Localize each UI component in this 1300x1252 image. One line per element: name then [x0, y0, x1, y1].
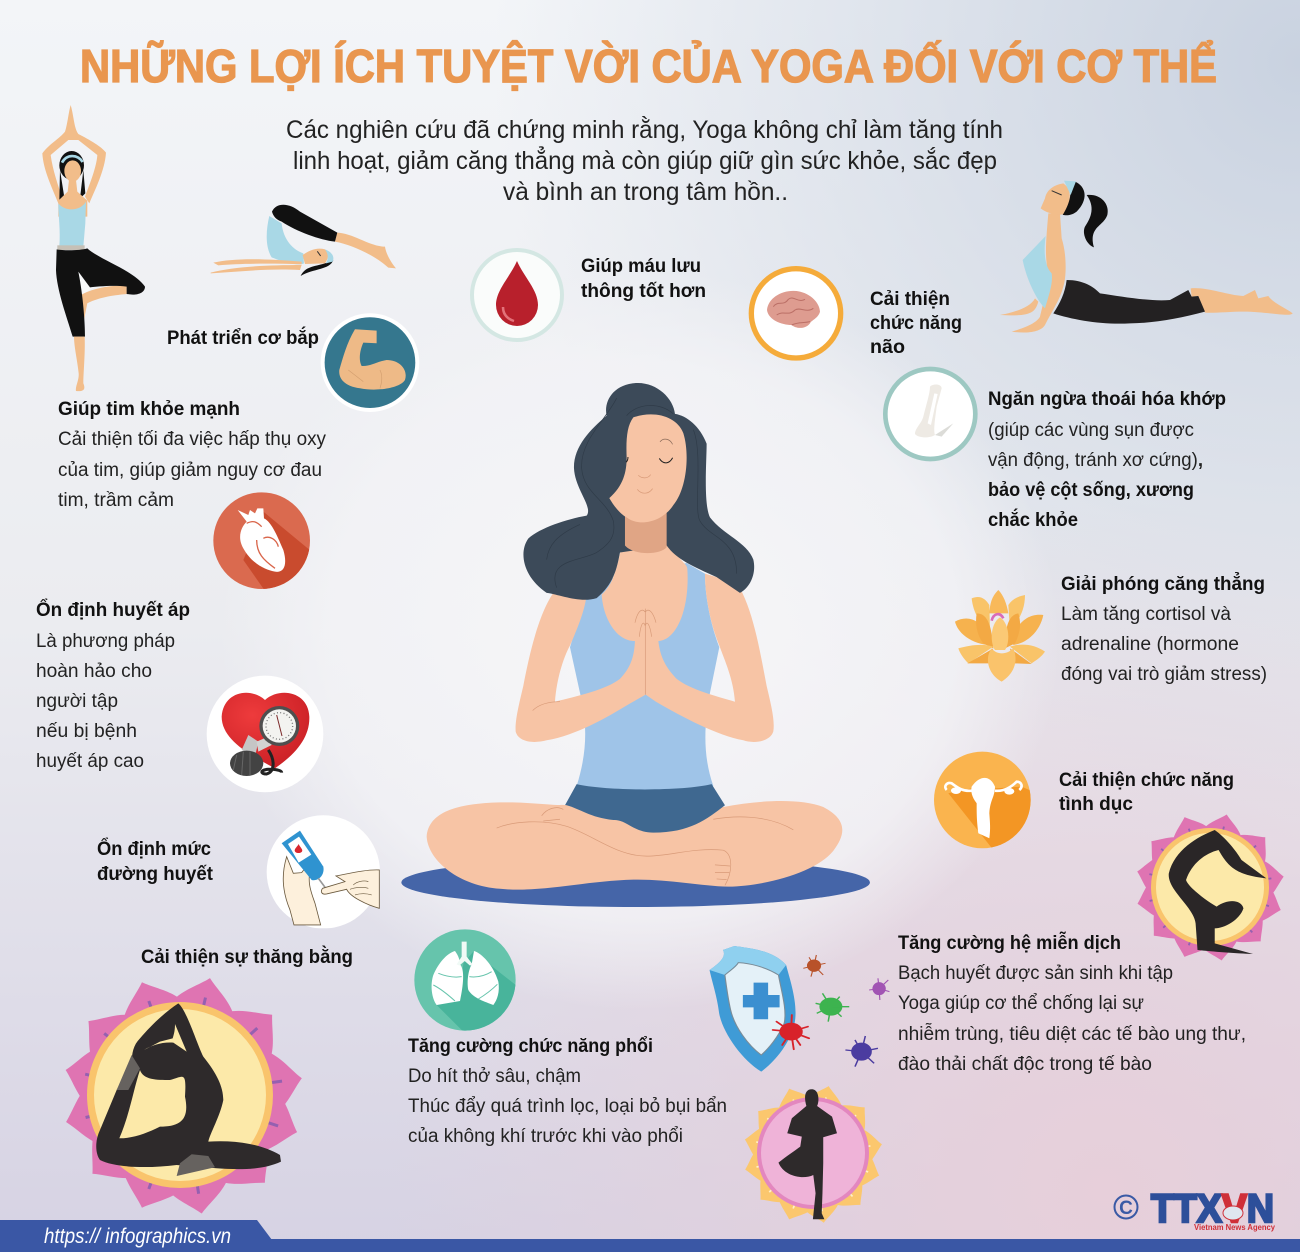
label: sexual function: Cải thiện chức năng [1059, 769, 1234, 791]
icon: lotus flower [955, 590, 1045, 682]
text: joint health: vận động, tránh xơ cứng), [988, 450, 1203, 471]
illustration: meditating woman [401, 383, 870, 907]
icon: muscle [321, 313, 419, 412]
text: joint health: bảo vệ cột sống, xương [988, 479, 1194, 501]
illustration: lotus pose scorpion [1133, 810, 1288, 964]
label: blood sugar: đường huyết [97, 863, 213, 885]
logo: TTXVN: TTXVN [1151, 1187, 1274, 1231]
text: blood pressure: Ổn định huyết áp [36, 597, 190, 621]
icon: heart [213, 492, 313, 593]
label: blood circulation: Giúp máu lưu [581, 255, 701, 277]
yoga mat [401, 858, 870, 907]
silhouette: pigeon pose [96, 1003, 281, 1176]
text: blood pressure: hoàn hảo cho [36, 661, 152, 682]
text: lungs: Do hít thở sâu, chậm [408, 1066, 581, 1087]
virus indigo [845, 1036, 878, 1067]
icon: shield and viruses [710, 946, 889, 1072]
hair [523, 383, 754, 600]
source url: https:// infographics.vn [44, 1225, 231, 1248]
intro text: Các nghiên cứu đã chứng minh rằng, Yoga không chỉ làm tăng tính [286, 115, 1003, 144]
illustration: lotus pose large [58, 970, 308, 1220]
hair strands [547, 398, 737, 588]
icon: uterus [934, 752, 1037, 850]
text: heart health: Cải thiện tối đa việc hấp thụ oxy [58, 429, 326, 450]
text: heart health: Giúp tim khỏe mạnh [58, 398, 240, 420]
text: lungs [408, 1035, 727, 1147]
text: immune system [898, 930, 1246, 1075]
text: blood pressure [36, 597, 190, 772]
label: brain function: não [870, 336, 905, 358]
label: muscle: Phát triển cơ bắp [167, 325, 319, 349]
illustration: cobra pose woman [1000, 181, 1293, 333]
closed eyes [626, 457, 673, 463]
neck [625, 510, 667, 553]
arms and hands [516, 574, 774, 742]
text: immune system: đào thải chất độc trong tế bào [898, 1054, 1152, 1075]
title: NHỮNG LỢI ÍCH TUYỆT VỜI CỦA YOGA ĐỐI VỚI CƠ THỂ [80, 40, 1217, 92]
chest [602, 538, 688, 641]
label: sexual function [1059, 769, 1234, 815]
illustration: tree pose woman [42, 105, 145, 391]
text: joint health: Ngăn ngừa thoái hóa khớp [988, 388, 1226, 410]
virus purple light [869, 978, 889, 1000]
virus orange [803, 955, 826, 977]
text: immune system: nhiễm trùng, tiêu diệt các tế bào ung thư, [898, 1023, 1246, 1045]
silhouette: tree pose [778, 1089, 837, 1219]
label: blood sugar [97, 836, 213, 885]
text: stress relief: Giải phóng căng thẳng [1061, 571, 1265, 595]
shorts [565, 784, 725, 833]
virus green [816, 993, 849, 1022]
text: blood pressure: Là phương pháp [36, 631, 175, 652]
silhouette: scorpion pose [1169, 830, 1266, 954]
icon: blood pressure heart [207, 676, 323, 792]
label: sexual function: tình dục [1059, 793, 1133, 815]
text: heart health [58, 398, 326, 511]
text: stress relief: adrenaline (hormone [1061, 634, 1239, 655]
label: balance: Cải thiện sự thăng bằng [141, 944, 353, 968]
label: blood circulation: thông tốt hơn [581, 280, 706, 302]
label: brain function [870, 288, 962, 358]
text: stress relief: Làm tăng cortisol và [1061, 604, 1231, 625]
text: blood pressure: nếu bị bệnh [36, 721, 137, 742]
label: blood circulation [581, 255, 706, 302]
figure line details [497, 439, 793, 885]
logo: TTXVN: Vietnam News Agency [1194, 1223, 1276, 1232]
text: joint health: chắc khỏe [988, 507, 1078, 531]
left foot [542, 805, 647, 837]
text: heart health: của tim, giúp giảm nguy cơ đau [58, 460, 322, 481]
text: joint health: (giúp các vùng sụn được [988, 420, 1194, 441]
intro text [286, 115, 1003, 206]
label: blood sugar: Ổn định mức [97, 836, 211, 860]
text: lungs: Tăng cường chức năng phổi [408, 1035, 653, 1057]
logo: TTXVN: C [1119, 1198, 1133, 1219]
illustration: plow pose woman [211, 205, 396, 276]
text: blood pressure: huyết áp cao [36, 751, 144, 772]
text: immune system: Bạch huyết được sản sinh khi tập [898, 963, 1173, 984]
face [609, 414, 687, 522]
text: lungs: của không khí trước khi vào phổi [408, 1126, 683, 1147]
icon: brain [751, 269, 841, 358]
footer bar [0, 1220, 1300, 1252]
text: heart health: tim, trầm cảm [58, 490, 174, 511]
text: lungs: Thúc đẩy quá trình lọc, loại bỏ bụi bẩn [408, 1096, 727, 1117]
text: immune system: Tăng cường hệ miễn dịch [898, 930, 1121, 954]
text: joint health [988, 388, 1226, 531]
text: immune system: Yoga giúp cơ thể chống lại sự [898, 993, 1144, 1014]
icon: lungs [414, 929, 520, 1035]
torso top [570, 563, 719, 791]
text: stress relief: đóng vai trò giảm stress) [1061, 664, 1267, 685]
icon: glucose meter [267, 815, 380, 929]
icon: joint [885, 369, 975, 459]
label: brain function: Cải thiện [870, 288, 950, 310]
illustration: lotus pose tree [741, 1082, 886, 1226]
label: brain function: chức năng [870, 312, 962, 334]
intro text: linh hoạt, giảm căng thẳng mà còn giúp giữ gìn sức khỏe, sắc đẹp [293, 145, 997, 175]
text: blood pressure: người tập [36, 691, 118, 712]
legs [427, 801, 842, 890]
text: stress relief [1061, 571, 1267, 685]
virus red [773, 1015, 809, 1049]
intro text: và bình an trong tâm hồn.. [503, 178, 788, 206]
icon: blood drop [472, 250, 562, 340]
